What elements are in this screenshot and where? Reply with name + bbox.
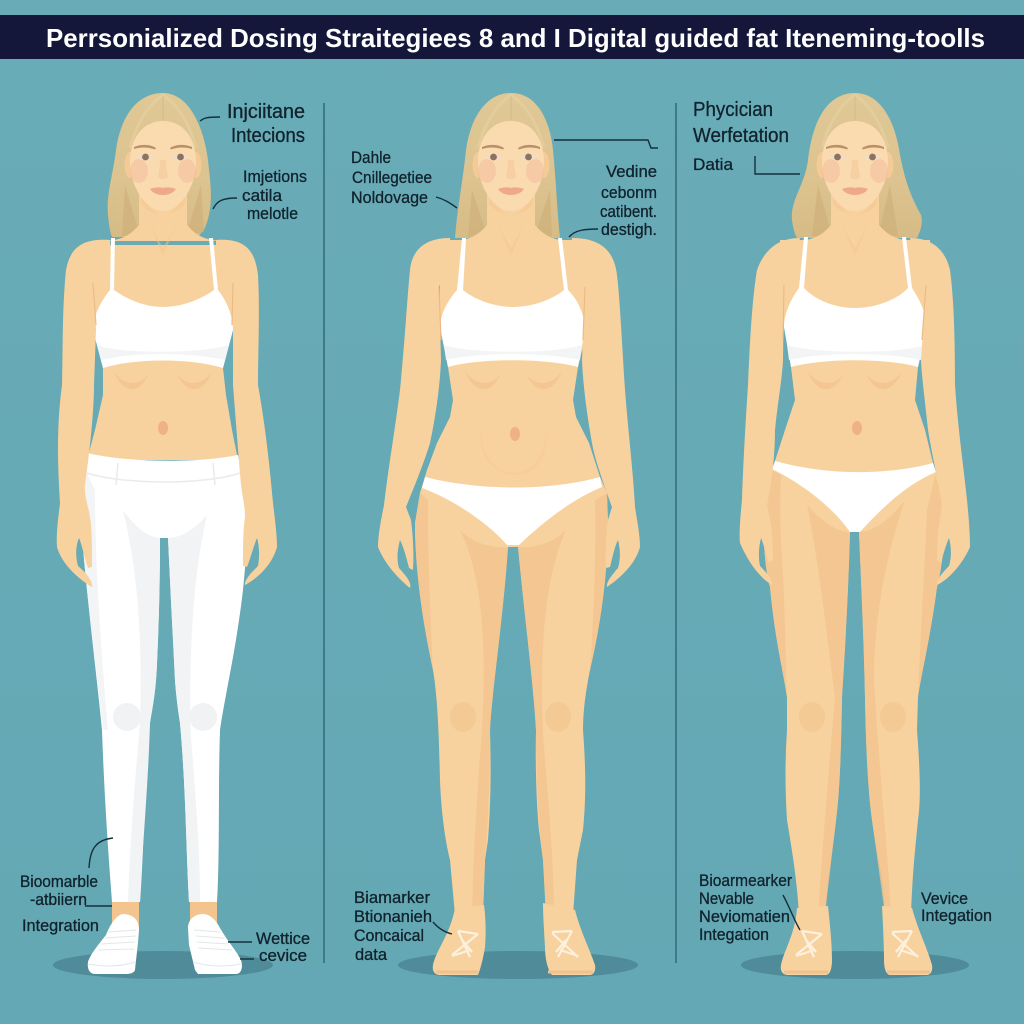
labels (20, 101, 310, 965)
labels: catila (242, 187, 283, 205)
face and neck (453, 121, 569, 256)
labels: Intecions (231, 125, 305, 147)
arms (378, 238, 640, 588)
floor shadow (398, 951, 638, 979)
labels: Vedine (606, 163, 657, 181)
arms (740, 238, 970, 585)
crop top (440, 238, 585, 367)
labels: Bioomarble (20, 873, 98, 891)
labels (351, 149, 657, 964)
labels: Phycician (693, 99, 773, 121)
labels: Noldovage (351, 189, 428, 207)
bikini bottom (772, 461, 936, 532)
crop top (784, 237, 927, 367)
divider right (675, 103, 677, 963)
sneakers (88, 914, 242, 974)
divider left (323, 103, 325, 963)
labels: Wettice (256, 930, 310, 948)
panel: left figure (20, 93, 310, 979)
labels: Btionanieh (354, 908, 432, 926)
labels: Vevice (921, 890, 968, 908)
labels: melotle (247, 205, 298, 223)
labels: destigh. (601, 221, 657, 239)
abdomen details (114, 372, 212, 435)
labels: Datia (693, 156, 734, 174)
panel: middle figure (351, 93, 658, 979)
title banner: Perrsonialized Dosing Straitegiees 8 and I Digital guided fat Iteneming-toolls (46, 23, 985, 53)
arms (57, 240, 277, 587)
labels: Integation (921, 907, 992, 925)
labels: Nevable (699, 890, 754, 908)
labels: Integration (22, 917, 99, 935)
bikini bottom (422, 477, 602, 545)
labels: Concaical (354, 927, 424, 945)
face and neck (797, 121, 913, 256)
labels: Werfetation (693, 125, 789, 147)
feet (433, 903, 595, 975)
labels: Imjetions (243, 168, 307, 186)
labels: Cnillegetiee (352, 169, 432, 187)
leggings (81, 453, 248, 902)
hair (455, 93, 560, 238)
torso and legs (415, 240, 608, 915)
face and neck (105, 121, 221, 256)
labels: Biamarker (354, 889, 431, 907)
feet (781, 906, 932, 975)
leader lines (755, 156, 800, 930)
torso and legs (763, 240, 945, 915)
title banner (0, 15, 1024, 59)
crop top (93, 238, 233, 368)
labels: cebonm (601, 184, 657, 202)
hair (792, 93, 922, 238)
labels: Bioarmearker (699, 872, 792, 890)
labels: Integation (699, 926, 769, 944)
torso (87, 245, 238, 460)
labels: catibent. (600, 203, 657, 221)
labels: -atbiiern (30, 891, 87, 909)
leader lines (85, 117, 254, 959)
leader lines (433, 140, 658, 934)
labels: Neviomatien (699, 908, 790, 926)
labels: Injciitane (227, 101, 305, 123)
labels: Dahle (351, 149, 391, 167)
panel: right figure (693, 93, 992, 979)
floor shadow (741, 951, 969, 979)
ankles (112, 902, 217, 930)
labels: data (355, 946, 388, 964)
labels (693, 99, 992, 944)
hair (108, 93, 211, 237)
floor shadow (53, 951, 273, 979)
labels: cevice (259, 947, 307, 965)
